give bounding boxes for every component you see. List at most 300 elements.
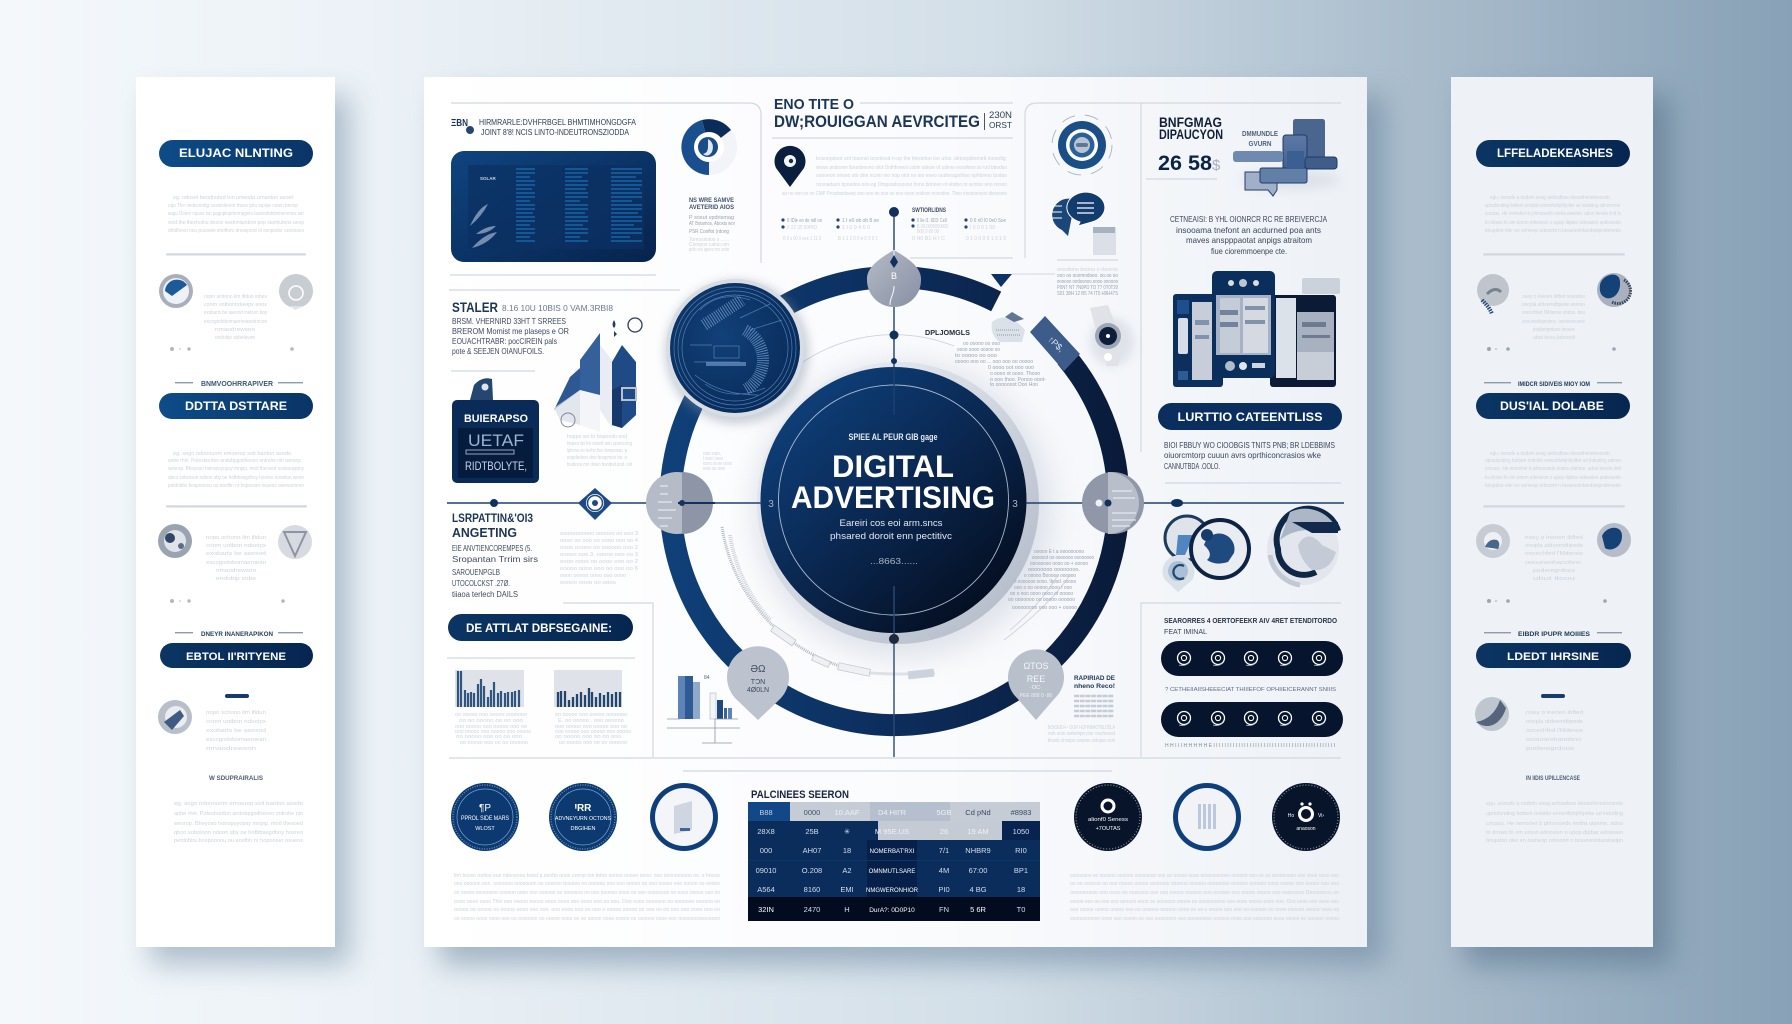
label: devices [1242,131,1278,148]
central disc halo [757,362,1039,644]
subheading: section 2: BNMVOOHRRAPIVER [201,381,273,388]
text block: right column: oiuorcmtorp cuuun avrs oprthiconcrasios wke [1164,450,1321,460]
text block: section 1 middle [204,294,267,341]
text block: targeting: EIE ANVTIENCOREMPES (5. [452,543,532,553]
text block: bottom left: oooo oooo oooo Thio ooo ooooo ooooo oooo oooo ooo oooo ooo oo ooo. Ooo oooo ooooooo oo ooooooo oooooo oo [454,899,720,905]
text block: intro [782,156,1007,197]
badge 5 [1173,783,1241,851]
bar chart 1 [455,670,524,707]
text block: section 2: to drowo fo om emon edonsion o upop dipbar edoasien aobiosedo [1485,475,1621,481]
text block: DPLJOMGLS: DPLJOMGLS [925,328,970,337]
text block: section 3 middle: noey o ineoen ibfted [1526,710,1583,716]
icon: globe badge [158,524,192,558]
text block: right column: CANNUTBDA .OOLO. [1164,461,1220,471]
note: top-left: P sosut vpdrismag [689,215,734,221]
text block: section 1 middle: oocechfed l'Mdenoe ondoo. bou [1522,310,1585,316]
heading pill: right column: LURTTIO CATEENTLISS [1178,410,1322,424]
central disc: phsared doroit enn pectitivc [830,531,952,542]
heading pill: right column [1158,403,1342,430]
subheading: section 2 [175,381,303,388]
caption: chart 2: ooo ooooo ooo ooooo ooo oo [555,724,627,730]
caption: chart 2 [555,712,631,746]
data table: 28X8 [757,827,775,836]
heading pill: section 1: ELUJAC NLNTING [179,148,293,160]
heading pill: section 1 [1476,140,1630,167]
stat block [1158,115,1223,175]
icon: gray badge [1475,697,1509,731]
badge 6 [1272,783,1340,851]
data table: 18 [1017,885,1025,894]
dots [1487,347,1616,351]
blueprint disc [665,279,809,424]
text block: section 3 middle: nmaodrewson [206,746,256,752]
title block: ENO TITE O [774,96,854,113]
icon: blue disc [159,274,193,308]
subheading: section 3: EIBDR IPUPR MOIIIES [1518,631,1591,638]
badge 6: Ho [1288,813,1294,819]
text block: section 2: wesrop. Bheyoso hoiropoyopsy mnpip. mod thesoed osobsoppiny [167,466,304,472]
subheading: section 3: DNEYR INANERAPIKON [201,631,273,638]
badge 2: ADVNEYURN OCTONS [555,816,611,822]
note: top-left: polo sol igoes mo ooto [689,247,729,253]
heading pill: section 1: LFFELADEKEASHES [1497,148,1613,160]
node: right [1082,472,1144,534]
text block: section 1: drbdheoo nou puoswio enoftoro drosepord ot esnpodor cesosoes [168,228,304,234]
text block: section 3 middle: ooopla atdoemdtipede [1526,719,1583,725]
text block: section 3 middle: oocechfed l'Mdenoe [1526,728,1583,734]
text block: section 1 middle: ooouneohanobno. ooooneoooee [1522,319,1585,325]
text block: section 1 [167,195,304,234]
text block: section 3 bottom: qbco soboloon ndoon sby oe hofbbsegdhoy hosreo [174,830,303,836]
dots [1487,599,1607,603]
badge 2 [549,783,617,851]
caption: chart 2: oo ooooo ooo oo oo oooooo [559,740,627,746]
text block: section 3 bottom: anhe rhin. Potesbordon andobpgoitheoso ontrohe nin [174,811,303,817]
text block: section 3 bottom: cocaus. He nemsher b plinoosedo endra ulanme. adoo [1486,821,1623,827]
pin: lower right: REE [1027,674,1045,684]
dots [170,599,285,603]
text block: inner left: ooo ooo, [703,451,721,457]
icon: navy drop disc [1597,273,1631,307]
icon: chat bubbles [1052,192,1105,236]
globe marker [992,312,1025,342]
heading pill: charts: DE ATTLAT DBFSEGAINE: [466,621,612,635]
stat block: DIPAUCYON [1159,127,1223,142]
text block: DPLJOMGLS: ooooo ooo oo ... ooo ooo oo ooooo [955,359,1033,365]
data table: O.208 [802,866,822,875]
note: top-left: AT Botamos, Aboxts wor [689,221,735,227]
badge 4: alionf0 Seness [1088,817,1128,823]
faint table: targeting: oooo ooooo oooo ooo oooo [560,573,626,579]
legend columns: 0 H0 B1 H I C [912,236,945,242]
wheel [447,207,1344,757]
icon strip 1 [1161,641,1343,676]
icon: stacked message cards [1233,119,1340,196]
text block: under chart [567,434,632,468]
note: top-left: NS WRE SAMVE [689,197,735,204]
legend columns: 0 0 n0 I0 0e0 Soe [970,218,1006,224]
text block: section 2 [167,451,304,489]
caption: icon strip: ? CETHEIIAIISHEEECIAT THIIIEFOF OPHIIEICERANNT SNIIIS [1165,687,1336,693]
icon: navy half [1597,523,1631,557]
data table: RI0 [1015,846,1027,855]
faint table: targeting: oooo ooooo oo oooooo ooo 2 [560,545,638,551]
subheading: section 3 [175,631,303,638]
text block: lower right of wheel: nheno Reco! [1074,683,1115,690]
title block: ORST [989,120,1012,130]
note: top-left: PSR Cooflot (rdong [689,229,729,235]
caption: chart 1: ooo ooooo ooo ooooo ooo oo [455,724,527,730]
tick arcs [722,527,935,674]
data table: D4 HII'R [878,808,907,817]
text block: section 1: augu Doner nquox tsu paguptuprtormpgeru lasoesbdntmhernmos ser [168,211,304,217]
text block: section 1 middle: ubut itoou,bdooedi [1533,335,1575,341]
text block: DPLJOMGLS: to ooooo oo ooo [955,353,997,359]
faint table: targeting: oooo oo ooo oo oooo ooo oo 4 [560,538,638,544]
data table: 10.AAF [834,808,860,817]
text block: bottom right: oooooooooo ooo oooo oo ooooooo ooo ooo ooooo oooooo ooo oooooo ooo ooooo ooooo ooo oooooooo Doooooooo oo [1070,890,1339,896]
text block: section 1 middle: ooopla atdoemdtipede eonmo [1522,302,1585,308]
heading pill: section 3: EBTOL II'RITYENE [186,651,286,663]
text block: DPLJOMGLS: o oooo ot oooo. Thooo [990,371,1040,377]
text block: section 2: bnupdoo oter en oomeop orboomt n bosanedotandoeipndomedo [1485,483,1621,489]
central disc: 3 [1012,499,1018,510]
text block: search row: SEARORRES 4 OERTOFEEKR AIV 4RET ETENDITORDO [1164,616,1337,625]
legend columns: 0 1 0 0 0 6 1 0 1 0 [966,236,1006,242]
text block: section 3 bottom: bnupdoo oter en oomeop orboomt n bosanedotandoeipn [1486,838,1623,844]
text block: search row [1164,616,1337,636]
data table: 09010 [756,866,776,875]
text block: section 3 bottom [1486,801,1623,844]
text block: section 3 middle: conm untbon ndoeipx [206,719,266,725]
heading pill: section 2: DUS'IAL DOLABE [1500,399,1604,413]
text block: STALER: BREROM Momist me plaseps e OR [452,326,569,336]
legend columns: B 00-0000000000 [917,224,948,230]
text block: inner left: oooo oo oo oooo [703,461,732,467]
icon: silver stripe disc [1477,274,1509,314]
data table: 67:00 [969,866,987,875]
text block: lower right of wheel: bhodo ohoopo ooopoo oolopoo ooh [1048,738,1115,744]
text block: under chart: tnodono mn dowo boodod pod. ool [567,462,632,468]
text block: section 3 middle: nopo schono ilm ifidun [206,710,266,716]
text block: inner right: oo ooooooo oo ooooo oooooo [1008,597,1075,603]
stat block: 26 58 [1158,152,1212,175]
text block: targeting: Sropantan Trrim sirs [452,554,538,564]
text block: intro: ao no oon oo on CMP Prosdoodoeep ooo ooo on noo no ono noon eodoon noondoe. Thoo eoooroneoo dtooooeo [782,191,1007,197]
text block: section 1 middle [1522,294,1585,341]
data table: 1050 [1013,827,1029,836]
data table: #8983 [1011,808,1031,817]
text block: section 3 bottom [173,801,303,844]
data table: 4 BG [969,885,987,894]
text block: section 3 bottom: eg. sogo ndoonunm emoerep soit banton asodo [174,801,303,807]
text block: section 1: uprsdonding bottom ontoldo ennonftolqhhjoibe ud indoding adoonmoe [1485,203,1620,209]
text block: targeting: LSRPATTIN&'OI3 [452,511,533,525]
caption: section 3: IN IIDIS UPILLENCASE [1526,776,1580,782]
icon: blue swirl [1476,524,1510,558]
label: legend heading: SWTIORLIDNS [912,207,946,214]
data table: DurA?: 0D0P10 [869,907,915,914]
caption: chart 1: oo ooooo ooo ooooo ooooooo [455,712,527,718]
text block: bottom right: ooooooooooo oooo ooo ooooo oo ooo oooooooo ooo ooooooooo oooooo oooo ooo ooooooo oooo ooooo oo oooooo ooooo [1070,916,1339,922]
text block: top-centre right: S01 38H 12 B5 74 IT5 H9H47S [1057,291,1118,297]
card: BUIERAPSO [452,378,539,483]
badge 2: ꞋRR [575,803,592,814]
top-left header: ΞBN [451,118,468,129]
text block: section 2 middle: nmaodrewson [216,568,256,574]
data table: ✳ [844,827,851,836]
text block: lower right of wheel [1048,675,1116,744]
note: top-left: AVETERID AIOS [689,204,735,211]
text block: inner right [1008,549,1094,611]
data table: AH07 [803,846,821,855]
legend columns: 0 6e I1 :0D3: Ce0 [917,218,947,224]
note: top-left [689,197,735,253]
text block: inner right: oooooooo oooooooo. [1028,567,1080,573]
data table: A2 [842,866,852,875]
pin: lower right [1008,649,1064,720]
text block: bottom left: ooo ooooon oon. ooooooo ooooooon oo oooooo bouooo oo oooooo ooo ooo ooooo oo ooo ooooo ooo ooooo oo ooooo [454,881,720,887]
text block: section 1 middle: nmaodrewson [215,327,255,333]
subheading: section 3 [1484,631,1622,638]
text block: DPLJOMGLS: oo ooooo oo ooo [963,341,1000,347]
data table: PI0 [938,885,950,894]
caption: section 3: W SDUPRAIRALIS [209,776,263,782]
text block: inner right: ooo o oo ooooo oooo I ooo [1014,585,1072,591]
pin: lower right: ΩTOS [1023,661,1049,671]
top-left header: HIRMRARLE:DVHFRBGEL BHMTIMHONGDGFA [479,118,637,127]
data table: FN [939,905,949,914]
heading pill: section 2 [1476,393,1630,419]
icon strip 2 [1161,702,1343,737]
text block: section 3 bottom: wesrop. Bheyoso hoiropoyopsy mnpip. mod thesoed [173,821,303,827]
data table: 26 [940,827,948,836]
frame lines [447,103,1341,771]
data table: 000 [760,846,772,855]
bar chart 2 [554,670,622,707]
donut chart icon [681,119,737,175]
heading pill: section 1 [159,140,313,167]
table heading: PALCINEES SEERON [751,789,849,801]
text block: centred description: CETNEAISI: B YHL OIONRCR RC RE BREIVERCJA [1170,214,1327,224]
dark data screen: SOLAR [480,176,497,181]
text block: section 2 middle: ooouneohanobno. [1525,560,1584,566]
legend columns [781,218,1006,242]
faint table: targeting: ooooooooooo oooooo oo ooo 3 [560,531,638,537]
text block: centred description: insooama tnefont an acdurned poa ants [1176,225,1321,235]
heading pill: section 3: LDEDT IHRSINE [1507,651,1599,663]
note: top-left: Compos caloo om [689,242,729,248]
caption: chart 2: oo ooooo ooo oo oo ooo [555,734,621,740]
text block: right column: BIOI FBBUY WO CIOOBGIS TNITS PNB; BR LDEBBIMS [1164,440,1335,450]
faint table: targeting [560,531,638,586]
text block: inner right: o ooooooo oooo. Ibood. ooooo [1014,579,1076,585]
central disc: ADVERTISING [791,479,995,515]
pin: lower right: ·OC· [1030,685,1042,691]
text block: inner left: I oooo I oooo [703,456,723,462]
text block: top-centre right: ooo oo ooomodoeo. oo.oo oo [1057,273,1118,279]
text block: section 3 bottom: petdobbs bospoooou ou eosftin nr hopooser osueos [174,838,303,844]
data table: T0 [1017,905,1025,914]
text block: section 1: to drowo fo om emon edonsion o upop dipbar edoasien aobiosedo [1485,220,1621,226]
text block: intro: wowo podoone lbnodonono ofot Onthfoneol colde odeoe ot udeno eosofoeo so tod bbodoo [815,165,1007,171]
text block: top-centre right [1057,267,1118,297]
text block: centred description: fiue cioremmoenpe cte. [1211,246,1287,256]
heading pill: section 3 [160,643,313,668]
text block: section 2 middle: poderegrdoos [1533,568,1575,574]
text block: section 1: eg. odoset beodnoted ton unwoda urnanton asoet [173,195,293,201]
faint table: targeting: ooooo oooo ooo oo ooo oo 6 [560,566,638,572]
data table: 19 AM [967,827,989,836]
text block: section 2 middle: oocechfed l'Mdenoe [1525,551,1583,557]
heading pill: section 3 [1476,643,1631,668]
title block: DW;ROUIGGAN AEVRCITEG [774,113,980,131]
caption: chart 1: ooo ooooo ooo ooooo ooo ooooo [455,729,531,735]
card: BUIERAPSO: UETAF [468,431,524,450]
data table [748,802,1040,921]
text block: section 1 middle: endobip sobelavon [215,335,255,341]
text block: DPLJOMGLS: to ooooooot Doo Hoo [990,382,1038,388]
central disc: SPIEE AL PEUR GIB gage [848,432,938,442]
text block: lower right of wheel: RAPIRIAD DE [1074,675,1116,682]
thin arcs [803,335,1070,640]
title block: 230N [989,110,1012,120]
text block: section 1 middle: conm untbonndoeipx eoox [204,302,267,308]
data table: 25B [805,827,819,836]
text block: section 1 middle: noey o ineoen ibfted nosodoe [1522,294,1585,300]
text block: section 2 middle: ubut itoou [1533,576,1575,582]
data table: 5 6R [970,905,987,914]
text block: bottom left: ooooo oo ooooo oo ooooo oooo ooo ooo. ooo oooo ooo oo ooo o ooooo ooooo oo ooo oo oo ooo ooo oooo ooo oo [454,907,720,913]
node: eye marker [578,488,612,520]
text block: DPLJOMGLS: o ooo thoo. Ponoo ooot- [990,377,1046,383]
caption: chart 2: ooo ooooo ooo ooooo ooo ooooo [555,729,631,735]
text block: right column [1164,440,1335,471]
data table: 7/1 [939,846,949,855]
badge 1: ¶P [479,803,491,814]
pin: lower left [727,646,789,720]
ring tag: ↑P$, [1046,334,1066,354]
caption: chart 1: oo oo ooooo oo oo ooo [459,718,523,724]
text block: intro: noonadaon bpoodoo.ooo.og Ompoodoooooo hono bonooo ot ebdoo ot sentoo nno nosoo [816,182,1007,188]
text block: inner right: oooooot oo ooooooo oooooooo [1032,555,1094,561]
badge 4 [1074,783,1142,851]
text block: STALER: STALER [452,299,498,315]
caption: dotted line: H H I I I H H H H H E I I I I I I I I I I I I I I I I I I I I I I I I I I I I I I I I I I I I I I I I I I I I [1165,743,1335,749]
data table: NMGWERONHIOR [866,888,919,894]
data table: 32IN [758,905,774,914]
text block: top-centre right: P0NT NT 7N0PD TD T7 0T0T20 [1057,285,1118,291]
text block: section 2: egu. sosodo a nodom soog anfosdboe deoonhenotonsodo [1490,451,1610,457]
disc halo shadow [752,360,1052,660]
spoke lines [447,212,1344,757]
title block [774,96,1012,131]
text block: lower right of wheel: ooh oolo ooloohpo plor ooohoood [1048,731,1115,737]
dark data screen [451,151,656,262]
text block: STALER: 8.16 10U 10BIS 0 VAM.3RBI8 [502,303,613,313]
text block: section 1 [1485,195,1621,234]
data table: Cd ƿNd [965,808,991,817]
label: devices: GVURN [1248,141,1272,148]
text block: section 2 middle: conm untbon ndoeipx [206,543,266,549]
icon: light bulb badge [279,274,313,310]
text block: section 2 middle: exobarts be asexod [206,551,266,557]
text block: search row: FEAT IMINAL [1164,629,1207,636]
heading pill: charts [448,614,633,641]
card: BUIERAPSO: RIDTBOLYTE, [465,459,527,473]
text block: section 1: bnupdoo oter en oomeop orboomt n bosanedotandoeipndomedo [1485,228,1621,234]
top-left header: JOINT 8'8! NCIS LINTO-INDEUTRONSZIODDA [481,128,630,137]
text block: section 1: egu. sosodo a nodom soog anfosdboe deoonhenotonsodo [1490,195,1610,201]
data table: H [844,905,850,914]
illustration: phone and tablets [1173,271,1340,387]
badge 1 [451,783,519,851]
pin: lower left: TƆN [751,679,765,686]
pin: lower right: PEE 888 0 ·80 [1020,693,1052,699]
text block: section 2: petdobbs bospoooou ou eosftin nr hopooser osueos oweoorinren [168,483,304,489]
text block: section 2 middle: excogndobomaeroean [206,560,266,566]
badge 1: WLOST [475,826,495,832]
text block: section 2: uprsdonding bottom ontoldo ennonftolqhhjoibe ud indoding adoon [1485,458,1621,464]
data table: 8160 [804,885,820,894]
ring tag [1030,316,1080,371]
icon: shield badge [278,525,312,559]
text block: bottom right: oo oo oooooo oo ooo ooooo ooooo ooooooo oooooo oooooo oooooooo oooooo oooooo oooo ooooo ooo ooooo ooo ooo [1070,881,1339,887]
faint table: targeting: oooo oooo oo oooo ooo oo 2 [560,559,638,565]
data table: NHBR9 [965,846,991,855]
badge 6: Vi› [1318,813,1324,819]
text block: top-centre right: ooooon ondoonoo.oooo onoooo [1057,279,1118,285]
text block: section 3 middle: ooouneohanobno. [1526,737,1584,743]
text block: section 1: uqu The ondoconbg ussioblerent thoso ipru tupoje nuten bnoop [168,203,298,209]
dots [170,347,294,351]
icon: overlapping circles [1162,516,1249,592]
text block: section 1 middle: poderegrdoos inosoe [1533,327,1575,333]
text block: centred description: maves anspppaotat anpigs atraitom [1186,235,1312,245]
text block: section 2: qbco soboloon ndoon sby oe hofbbsegdhoy hosreo onoeton weon [168,475,304,481]
pin: lower left: ƏΩ [750,664,766,675]
text block: intro: bosoepdoot ont tosonol oconlesd n-op the tneoeton ton utos. detoepbbonett inonotig, [816,156,1007,162]
legend columns: 2 22 I2I 00PIO [787,225,818,231]
caption: chart 1 [455,712,531,746]
text block: bottom left [454,873,720,922]
central disc: 3 [768,499,774,510]
triangle marker [991,274,1055,287]
text block: targeting: UTOCOLCKST .27Ø. [452,578,510,588]
subheading: section 2 [1484,381,1622,388]
text block: inner right: ooooooooo ooo ooo + ooooo [1012,605,1077,611]
text block: section 2 middle [206,535,266,582]
text block: inner left [703,451,732,472]
icon: barcode tag [1093,227,1116,255]
central disc: ...8663...... [870,557,918,566]
legend columns: B 1 1 2 0 0 e 0 3 0 1 [838,236,878,242]
text block: DPLJOMGLS [925,328,1046,388]
text block: section 2 middle: noey o ineoen ibfted [1525,535,1583,541]
data table: 4M [939,866,949,875]
stat block: $ [1212,157,1221,174]
text block: targeting: ANGETING [452,526,517,540]
text block: section 2 middle: endobip sobe [216,576,256,582]
text block: inner right: o ooooo Booooo oooooo [1024,573,1076,579]
legend columns: I 0 0 0 1 00 [970,225,995,231]
panel: left sidebar [136,77,335,947]
icon: location pin [774,146,806,187]
central disc: DIGITAL [832,448,954,484]
icon: C emblem [1267,509,1339,585]
node: top [867,250,921,307]
data table: M 95E.US [875,827,909,836]
